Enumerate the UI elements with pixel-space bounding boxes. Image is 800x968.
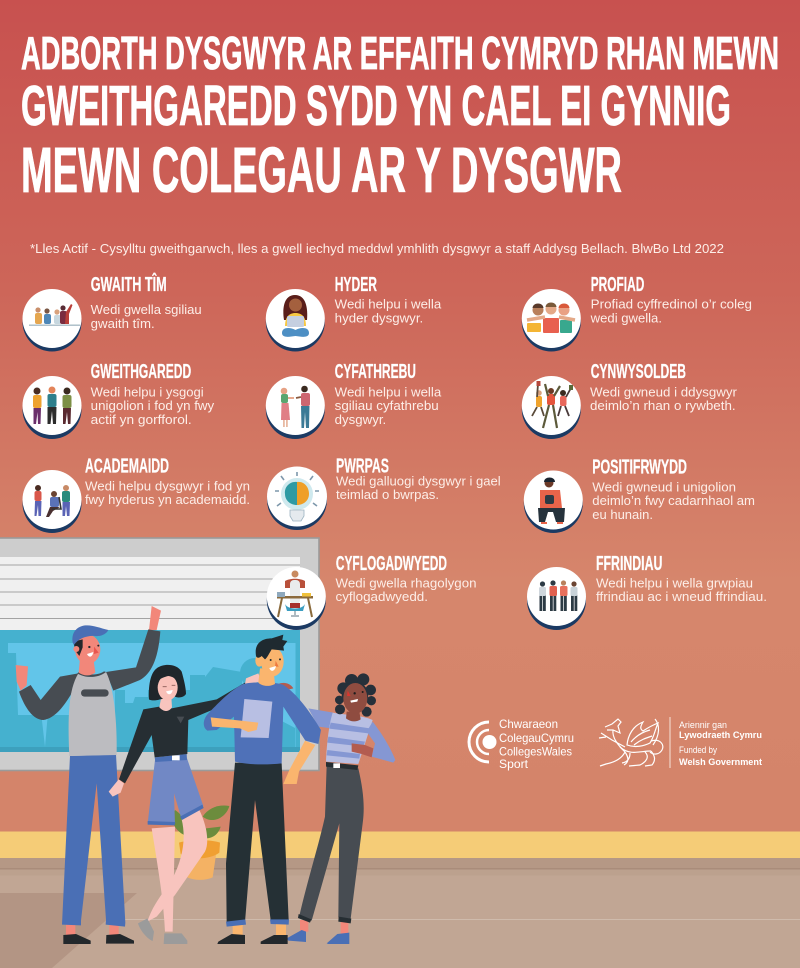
item: positifrwydd bbox=[524, 456, 755, 533]
description: unigolion i fod yn fwy bbox=[91, 398, 215, 413]
description: cyflogadwyedd. bbox=[336, 589, 428, 604]
description bbox=[91, 385, 215, 427]
item: pwrpas bbox=[267, 456, 501, 530]
item: academaidd bbox=[22, 456, 250, 533]
description: fwy hyderus yn academaidd. bbox=[85, 492, 250, 507]
heading: PWRPAS bbox=[336, 456, 389, 478]
description: Wedi galluogi dysgwyr i gael bbox=[336, 473, 501, 488]
item: profiad bbox=[522, 274, 752, 352]
plant bbox=[173, 805, 229, 880]
logo: Welsh Government bbox=[679, 720, 762, 767]
item: ffrindiau bbox=[527, 553, 767, 630]
description bbox=[592, 479, 755, 522]
icon: woman with laptop bbox=[266, 289, 325, 352]
description: Profiad cyffredinol o’r coleg bbox=[591, 297, 752, 312]
description: teimlad o bwrpas. bbox=[336, 487, 439, 502]
description bbox=[91, 302, 202, 331]
icon: students with chair bbox=[22, 470, 82, 533]
description: Wedi gwella rhagolygon bbox=[336, 575, 476, 590]
heading: GWAITH TÎM bbox=[91, 272, 167, 296]
item: cynwysoldeb bbox=[522, 361, 738, 439]
description: dysgwyr. bbox=[335, 412, 386, 427]
icon: man at desk bbox=[267, 567, 326, 630]
icon: lightbulb brain bbox=[267, 466, 327, 530]
description: eu hunain. bbox=[592, 507, 653, 522]
description: ffrindiau ac i wneud ffrindiau. bbox=[596, 589, 767, 604]
heading: CYNWYSOLDEB bbox=[591, 361, 686, 383]
icon: seated person bbox=[524, 470, 583, 533]
person: man in cap bbox=[16, 606, 161, 944]
heading: GWEITHGAREDD bbox=[91, 361, 191, 383]
logo: Colleges Wales Sport: ColegauCymru bbox=[499, 731, 574, 745]
icon: jumping people bbox=[522, 376, 581, 439]
description: Wedi helpu dysgwyr i fod yn bbox=[85, 479, 250, 494]
title bbox=[21, 27, 779, 206]
icon: three friends bbox=[522, 289, 581, 352]
description: Wedi helpu i wella grwpiau bbox=[596, 575, 753, 590]
window with blinds bbox=[0, 538, 319, 770]
source footnote: *Lles Actif - Cysylltu gweithgarwch, lles a gwell iechyd meddwl ymhlith dysgwyr a staff Addysg Bellach. BlwBo Ltd 2022 bbox=[30, 241, 724, 256]
description bbox=[596, 575, 767, 604]
item: cyflogadwyedd bbox=[267, 553, 476, 630]
description: hyder dysgwyr. bbox=[335, 311, 423, 326]
description: deimlo’n fwy cadarnhaol am bbox=[592, 493, 755, 508]
description: Wedi helpu i wella bbox=[335, 297, 442, 312]
heading: FFRINDIAU bbox=[596, 553, 662, 575]
yellow wall band bbox=[0, 832, 800, 858]
description: Wedi gwella sgiliau bbox=[91, 302, 202, 317]
description: Wedi gwneud i ddysgwyr bbox=[590, 385, 738, 400]
logo: Welsh Government: Ariennir gan bbox=[679, 720, 727, 730]
description bbox=[335, 385, 442, 427]
logo: Welsh Government: Welsh Government bbox=[679, 757, 762, 767]
description: Wedi gwneud i unigolion bbox=[592, 479, 736, 494]
icon: team group bbox=[22, 289, 82, 352]
logo: Colleges Wales Sport: Chwaraeon bbox=[499, 717, 558, 731]
description: actif yn gorfforol. bbox=[91, 412, 192, 427]
item: gweithgaredd bbox=[22, 361, 215, 439]
logo: Colleges Wales Sport: CollegesWales bbox=[499, 744, 572, 758]
description bbox=[590, 385, 738, 413]
person: woman with curly hair bbox=[278, 673, 395, 944]
description bbox=[85, 479, 250, 507]
logo: Colleges Wales Sport bbox=[469, 717, 574, 771]
description: sgiliau cyfathrebu bbox=[335, 398, 439, 413]
icon: two people talking bbox=[266, 376, 325, 439]
description: Wedi helpu i ysgogi bbox=[91, 385, 204, 400]
icon: four friends bbox=[527, 567, 586, 630]
heading: CYFLOGADWYEDD bbox=[336, 553, 447, 575]
heading: CYFATHREBU bbox=[335, 361, 416, 383]
description bbox=[335, 297, 442, 326]
illustration: four friends and plant bbox=[16, 606, 395, 944]
heading: PROFIAD bbox=[591, 274, 644, 296]
description: deimlo’n rhan o rywbeth. bbox=[590, 398, 736, 413]
item: cyfathrebu bbox=[266, 361, 442, 439]
heading: POSITIFRWYDD bbox=[592, 456, 687, 478]
divider line bbox=[670, 717, 671, 768]
heading: HYDER bbox=[335, 274, 377, 296]
person: man in blue sweater bbox=[204, 635, 321, 944]
description: wedi gwella. bbox=[590, 311, 662, 326]
person: woman in black top bbox=[109, 665, 247, 944]
description bbox=[336, 575, 476, 604]
icon: three walking people bbox=[22, 376, 82, 439]
description: Wedi helpu i wella bbox=[335, 385, 442, 400]
item: hyder bbox=[266, 274, 442, 352]
item: gwaith tim bbox=[22, 272, 202, 352]
logo: Welsh dragon bbox=[599, 719, 663, 766]
description bbox=[590, 297, 752, 326]
description: gwaith tîm. bbox=[91, 316, 155, 331]
logo: Welsh Government: Lywodraeth Cymru bbox=[679, 730, 762, 740]
description bbox=[336, 473, 501, 502]
logo: Welsh Government: Funded by bbox=[679, 745, 717, 755]
floor bbox=[0, 858, 800, 968]
logo: Colleges Wales Sport: Sport bbox=[499, 757, 529, 771]
heading: ACADEMAIDD bbox=[85, 456, 169, 478]
